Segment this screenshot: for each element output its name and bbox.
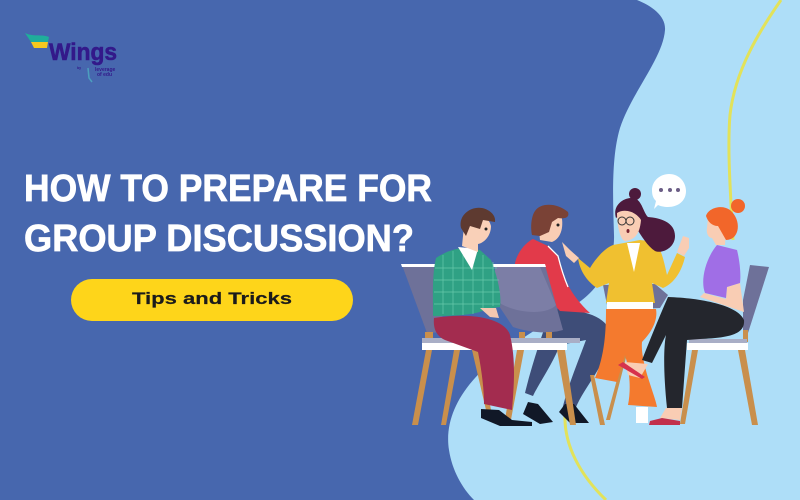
logo: Wings bbox=[25, 33, 117, 82]
sweater bbox=[515, 239, 590, 313]
hands bbox=[562, 242, 579, 263]
arm and skin bbox=[700, 283, 744, 312]
head and hair bbox=[707, 214, 726, 245]
shoes bbox=[481, 409, 532, 426]
logo subtext: by bbox=[77, 66, 81, 70]
logo subtext bbox=[77, 66, 116, 78]
head and hair bbox=[538, 211, 562, 242]
chair: right bbox=[680, 265, 769, 425]
foot and shoe bbox=[660, 408, 682, 420]
chair: middle woman's back bbox=[603, 284, 668, 310]
foot crossed bbox=[625, 362, 648, 378]
light blue background blob bbox=[448, 0, 800, 500]
shoes bbox=[523, 402, 589, 424]
trousers bbox=[525, 309, 610, 412]
yellow pill label: Tips and Tricks: Tips and Tricks bbox=[132, 289, 292, 308]
person 1: man in green sweater bbox=[433, 208, 532, 426]
speech bubble bbox=[652, 174, 686, 209]
hand bbox=[480, 308, 499, 318]
legs bbox=[642, 297, 744, 408]
person 4: woman in purple top bbox=[618, 199, 745, 425]
trousers bbox=[434, 316, 514, 410]
head and hair bbox=[462, 215, 491, 252]
cardigan bbox=[578, 240, 685, 303]
chair: left pair bbox=[401, 264, 580, 425]
foot bbox=[636, 407, 648, 423]
logo subtext: of edu bbox=[97, 72, 112, 78]
trousers bbox=[595, 309, 657, 407]
yellow curved line bbox=[565, 0, 781, 500]
title: HOW TO PREPARE FOR bbox=[24, 168, 432, 210]
hair bbox=[615, 198, 675, 252]
person 2: man in red sweater bbox=[515, 205, 610, 424]
logo wordmark: Wings bbox=[49, 39, 117, 66]
title: GROUP DISCUSSION? bbox=[24, 218, 414, 260]
chair legs bbox=[680, 350, 758, 425]
logo subtext: leverage bbox=[95, 67, 116, 73]
logo flag icon bbox=[25, 33, 49, 48]
chair legs bbox=[412, 350, 576, 425]
sweater bbox=[433, 248, 500, 316]
yellow pill label: Tips and Tricks bbox=[71, 279, 353, 321]
group of people on chairs bbox=[401, 174, 769, 426]
person 3: woman in yellow cardigan bbox=[562, 174, 689, 423]
purple top bbox=[703, 245, 740, 298]
face bbox=[617, 211, 641, 241]
chair legs: middle woman bbox=[590, 350, 628, 425]
